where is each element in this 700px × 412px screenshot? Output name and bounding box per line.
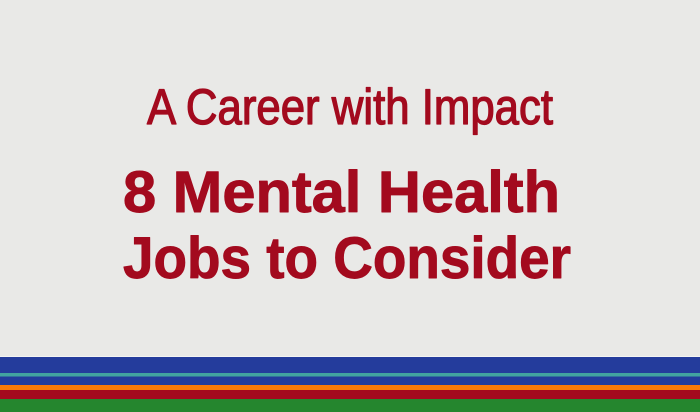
- colored stripes band: [0, 356, 700, 412]
- title: 8 Mental Health Jobs to Consider: Jobs to Consider: [123, 226, 571, 291]
- title: 8 Mental Health Jobs to Consider: 8 Mental Health: [123, 160, 560, 225]
- title: 8 Mental Health Jobs to Consider: [123, 160, 571, 291]
- subtitle: A Career with Impact: A Career with Impact: [147, 79, 553, 135]
